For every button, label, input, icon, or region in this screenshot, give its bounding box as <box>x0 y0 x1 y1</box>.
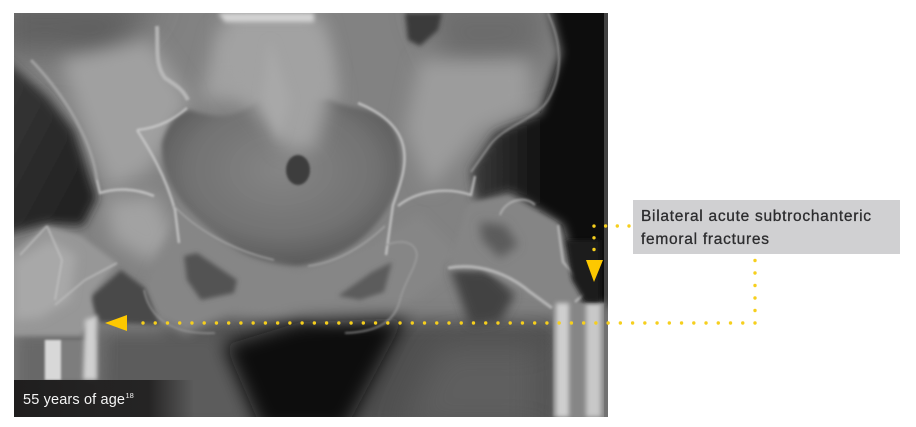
dark foramen in sacrum <box>286 155 310 185</box>
dark region: right of ilium <box>471 0 620 305</box>
dark region: left of ilium <box>0 55 97 236</box>
soft tissue and background tones <box>0 0 560 427</box>
light iliac bone areas <box>60 30 530 262</box>
pelvic cavity <box>162 100 401 266</box>
right femoral shaft <box>553 303 605 417</box>
dark region below left femoral neck <box>87 270 160 325</box>
age caption bar <box>14 380 194 417</box>
dark region below right femoral neck <box>450 268 515 326</box>
callout label box <box>633 200 900 254</box>
bone contour lines <box>20 13 588 333</box>
callout text: femoral fractures <box>641 231 769 248</box>
bowel gas <box>405 13 442 46</box>
obturator foramen: left <box>184 253 237 300</box>
callout text <box>641 208 871 248</box>
image edge shading <box>604 13 608 417</box>
arrow: to left femur fracture <box>105 260 755 331</box>
obturator foramen: right <box>338 262 392 300</box>
pubic rami <box>162 232 395 338</box>
arrow: to right femur fracture <box>586 226 629 282</box>
x-ray photograph <box>0 0 620 427</box>
left femoral head and neck <box>10 226 117 336</box>
dark lower centre <box>225 318 405 427</box>
callout text: Bilateral acute subtrochanteric <box>641 208 871 225</box>
sacrum and spine <box>225 14 332 150</box>
dark gap at right fracture <box>566 240 600 302</box>
age caption: 55 years of age <box>23 392 125 408</box>
left femoral shaft <box>44 315 97 380</box>
right femoral head and neck <box>448 196 588 306</box>
citation number: 18 <box>126 391 134 400</box>
